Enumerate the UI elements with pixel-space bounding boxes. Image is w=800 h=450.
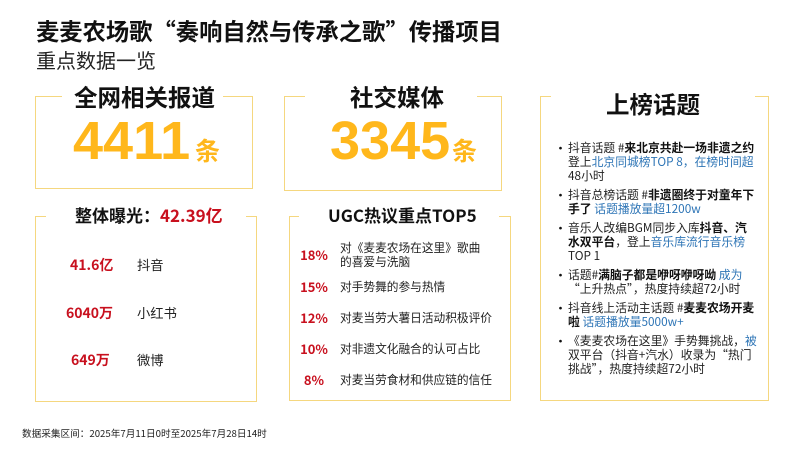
topic 5: 啦 话题播放量5000w+: [568, 313, 684, 330]
item 1: 的喜爱与洗脑: [340, 253, 410, 270]
heading: trending topics: 上榜话题: [606, 86, 700, 120]
footnote: data collection period: 数据采集区间：2025年7月11日0时至2025年7月28日14时: [22, 426, 267, 440]
row: Xiaohongshu: 小红书: [137, 303, 177, 322]
item 1: 对《麦麦农场在这里》歌曲: [340, 239, 480, 256]
panel: UGC top 5: [289, 202, 511, 401]
topic 3: TOP 1: [568, 247, 600, 264]
topic 6: [554, 331, 757, 377]
panel: social media: [284, 79, 502, 191]
item 4: 对非遗文化融合的认可占比: [340, 340, 480, 357]
topic 4: “上升热点”，热度持续超72小时: [568, 280, 740, 297]
row: Weibo: [71, 350, 164, 370]
unit: 条: [452, 132, 477, 168]
item 3: 12%: [300, 308, 328, 327]
topic 4: •: [554, 265, 567, 284]
topic 6: 双平台（抖音+汽水）收录为“热门: [568, 346, 752, 363]
topic list: [554, 138, 757, 377]
heading: overall exposure 42.39亿: 整体曝光：42.39亿: [75, 202, 223, 227]
row: Weibo: 649万: [71, 350, 110, 370]
topic 3: 音乐人改编BGM同步入库抖音、汽: [568, 219, 747, 236]
topic 5: •: [554, 298, 567, 317]
item 2: 15%: [300, 277, 328, 296]
topic 5: 抖音线上活动主话题 #麦麦农场开麦: [568, 299, 754, 316]
topic 4: 话题#满脑子都是咿呀咿呀呦 成为: [568, 266, 742, 283]
topic 1: 48小时: [568, 167, 605, 184]
item 1: 18%: [300, 245, 328, 264]
topic 3: [554, 218, 747, 264]
subtitle: 重点数据一览: [36, 45, 156, 74]
row: Xiaohongshu: [66, 303, 177, 323]
topic 6: 《麦麦农场在这里》手势舞挑战，被: [568, 332, 757, 349]
topic 6: •: [554, 331, 567, 350]
topic 3: 水双平台，登上音乐库流行音乐榜: [568, 233, 745, 250]
row: Weibo: 微博: [137, 350, 164, 369]
item 1: [300, 239, 480, 270]
topic 5: [554, 298, 754, 330]
topic 2: •: [554, 185, 567, 204]
topic 1: 抖音话题 #来北京共赴一场非遗之约: [568, 139, 754, 156]
heading: social media: 社交媒体: [350, 79, 444, 113]
panel: overall exposure: [35, 202, 257, 402]
title: 麦麦农场歌“奏响自然与传承之歌”传播项目: [36, 13, 502, 47]
item 2: 对手势舞的参与热情: [340, 278, 445, 295]
number: 4411: 4411: [73, 111, 190, 171]
topic 4: [554, 265, 742, 297]
panel: all-web coverage: [35, 79, 253, 189]
topic 1: [554, 138, 754, 184]
unit: 条: [195, 132, 220, 168]
row: Douyin: 41.6亿: [70, 255, 113, 275]
topic 3: •: [554, 218, 567, 237]
heading: UGC top 5: UGC热议重点TOP5: [328, 202, 477, 227]
item 4: 10%: [300, 339, 328, 358]
row: Douyin: 抖音: [137, 255, 164, 274]
topic 2: [554, 185, 754, 217]
item 4: [300, 339, 480, 358]
item 5: 对麦当劳食材和供应链的信任: [340, 371, 492, 388]
row: Douyin: [70, 255, 164, 275]
item 2: [300, 277, 445, 296]
item 3: 对麦当劳大薯日活动积极评价: [340, 309, 492, 326]
heading: all-web coverage: 全网相关报道: [74, 79, 215, 113]
row: Xiaohongshu: 6040万: [66, 303, 113, 323]
topic 2: 抖音总榜话题 #非遗圈终于对童年下: [568, 186, 754, 203]
number: 3345: 3345: [330, 111, 450, 171]
topic 1: •: [554, 138, 567, 157]
panel: trending topics: [540, 86, 769, 401]
topic 1: 登上北京同城榜TOP 8，在榜时间超: [568, 153, 754, 170]
item 5: 8%: [304, 370, 324, 389]
topic 6: 挑战”，热度持续超72小时: [568, 360, 705, 377]
topic 2: 手了 话题播放量超1200w: [568, 200, 701, 217]
